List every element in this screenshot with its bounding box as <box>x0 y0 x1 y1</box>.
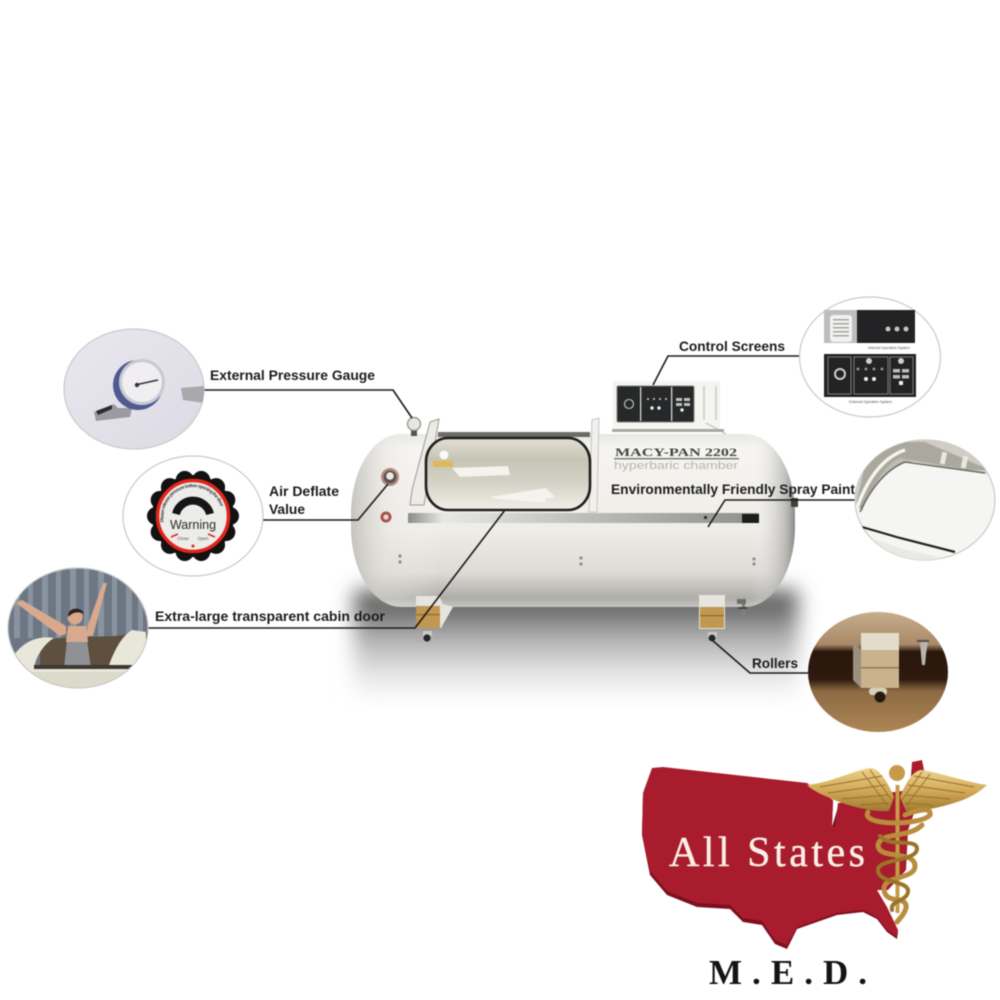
leader line: rollers <box>712 640 808 673</box>
air deflate valve <box>380 468 399 522</box>
pressure gauge on chamber <box>408 418 420 436</box>
logo text: All States: All States <box>669 830 865 876</box>
label: rollers: Rollers <box>752 656 798 671</box>
external operation system: External Operation System <box>849 400 892 404</box>
label: control screens: Control Screens <box>679 339 785 354</box>
side fitting <box>791 498 798 507</box>
bubble: air deflate warning badge <box>122 455 264 577</box>
chamber body <box>351 434 795 607</box>
control panel on top <box>612 381 726 434</box>
leader line: air deflate <box>263 484 388 520</box>
brand mark <box>614 447 739 472</box>
bubble: rollers <box>808 612 948 732</box>
right leg with wood base <box>699 595 725 641</box>
scalloped warning dial: Open <box>197 536 209 541</box>
leader line: control screens <box>653 356 799 385</box>
map of the USA <box>642 760 926 949</box>
logo: All States MED <box>642 760 987 992</box>
scalloped warning dial: Warning <box>170 518 216 532</box>
brand mark: hyperbaric chamber <box>614 460 738 472</box>
woman <box>16 583 107 668</box>
bubble: spray paint <box>855 440 995 560</box>
leader line: spray paint <box>708 500 856 527</box>
logo text: M.E.D.: M . E . D . <box>709 953 867 992</box>
drain valve <box>737 599 747 619</box>
label: air deflate value: Value <box>269 502 305 517</box>
left leg with wood base <box>416 596 453 642</box>
cabin door frame <box>410 418 599 512</box>
bubble outline: woman <box>8 568 148 688</box>
scalloped warning dial: Close <box>177 536 189 541</box>
brand mark: MACY-PAN 2202 <box>615 447 737 459</box>
steel handrail <box>408 513 759 523</box>
side bolts <box>398 554 756 566</box>
chamber floor shadow <box>354 590 798 702</box>
snakes <box>867 810 930 922</box>
staff <box>896 785 900 913</box>
scalloped warning dial: Please release pressure before opening the door <box>160 483 224 523</box>
hyperbaric chamber <box>351 381 798 642</box>
bubble: woman in chamber <box>8 568 148 688</box>
scalloped warning dial <box>146 470 240 562</box>
bubble: external pressure gauge <box>64 329 204 449</box>
label: cabin door: Extra-large transparent cabin door <box>155 609 386 624</box>
right wing <box>900 770 987 811</box>
label: air deflate value: Air Deflate <box>269 484 339 499</box>
bubble: control screens <box>800 297 940 417</box>
chamber shell <box>14 630 147 673</box>
transparent cabin door window <box>426 438 590 510</box>
internal operation system: Internal Operation System <box>868 346 910 350</box>
label: spray paint: Environmentally Friendly Spray Paint <box>611 482 856 497</box>
leader line: pressure gauge <box>204 390 412 418</box>
internal operation system <box>824 310 915 350</box>
chamber interior <box>40 632 148 666</box>
caduceus <box>807 765 987 922</box>
orb <box>889 765 905 781</box>
external operation system <box>824 354 916 404</box>
leader line: cabin door <box>148 510 505 628</box>
left wing <box>807 768 894 811</box>
label: external pressure gauge: External Pressure Gauge <box>210 368 376 383</box>
